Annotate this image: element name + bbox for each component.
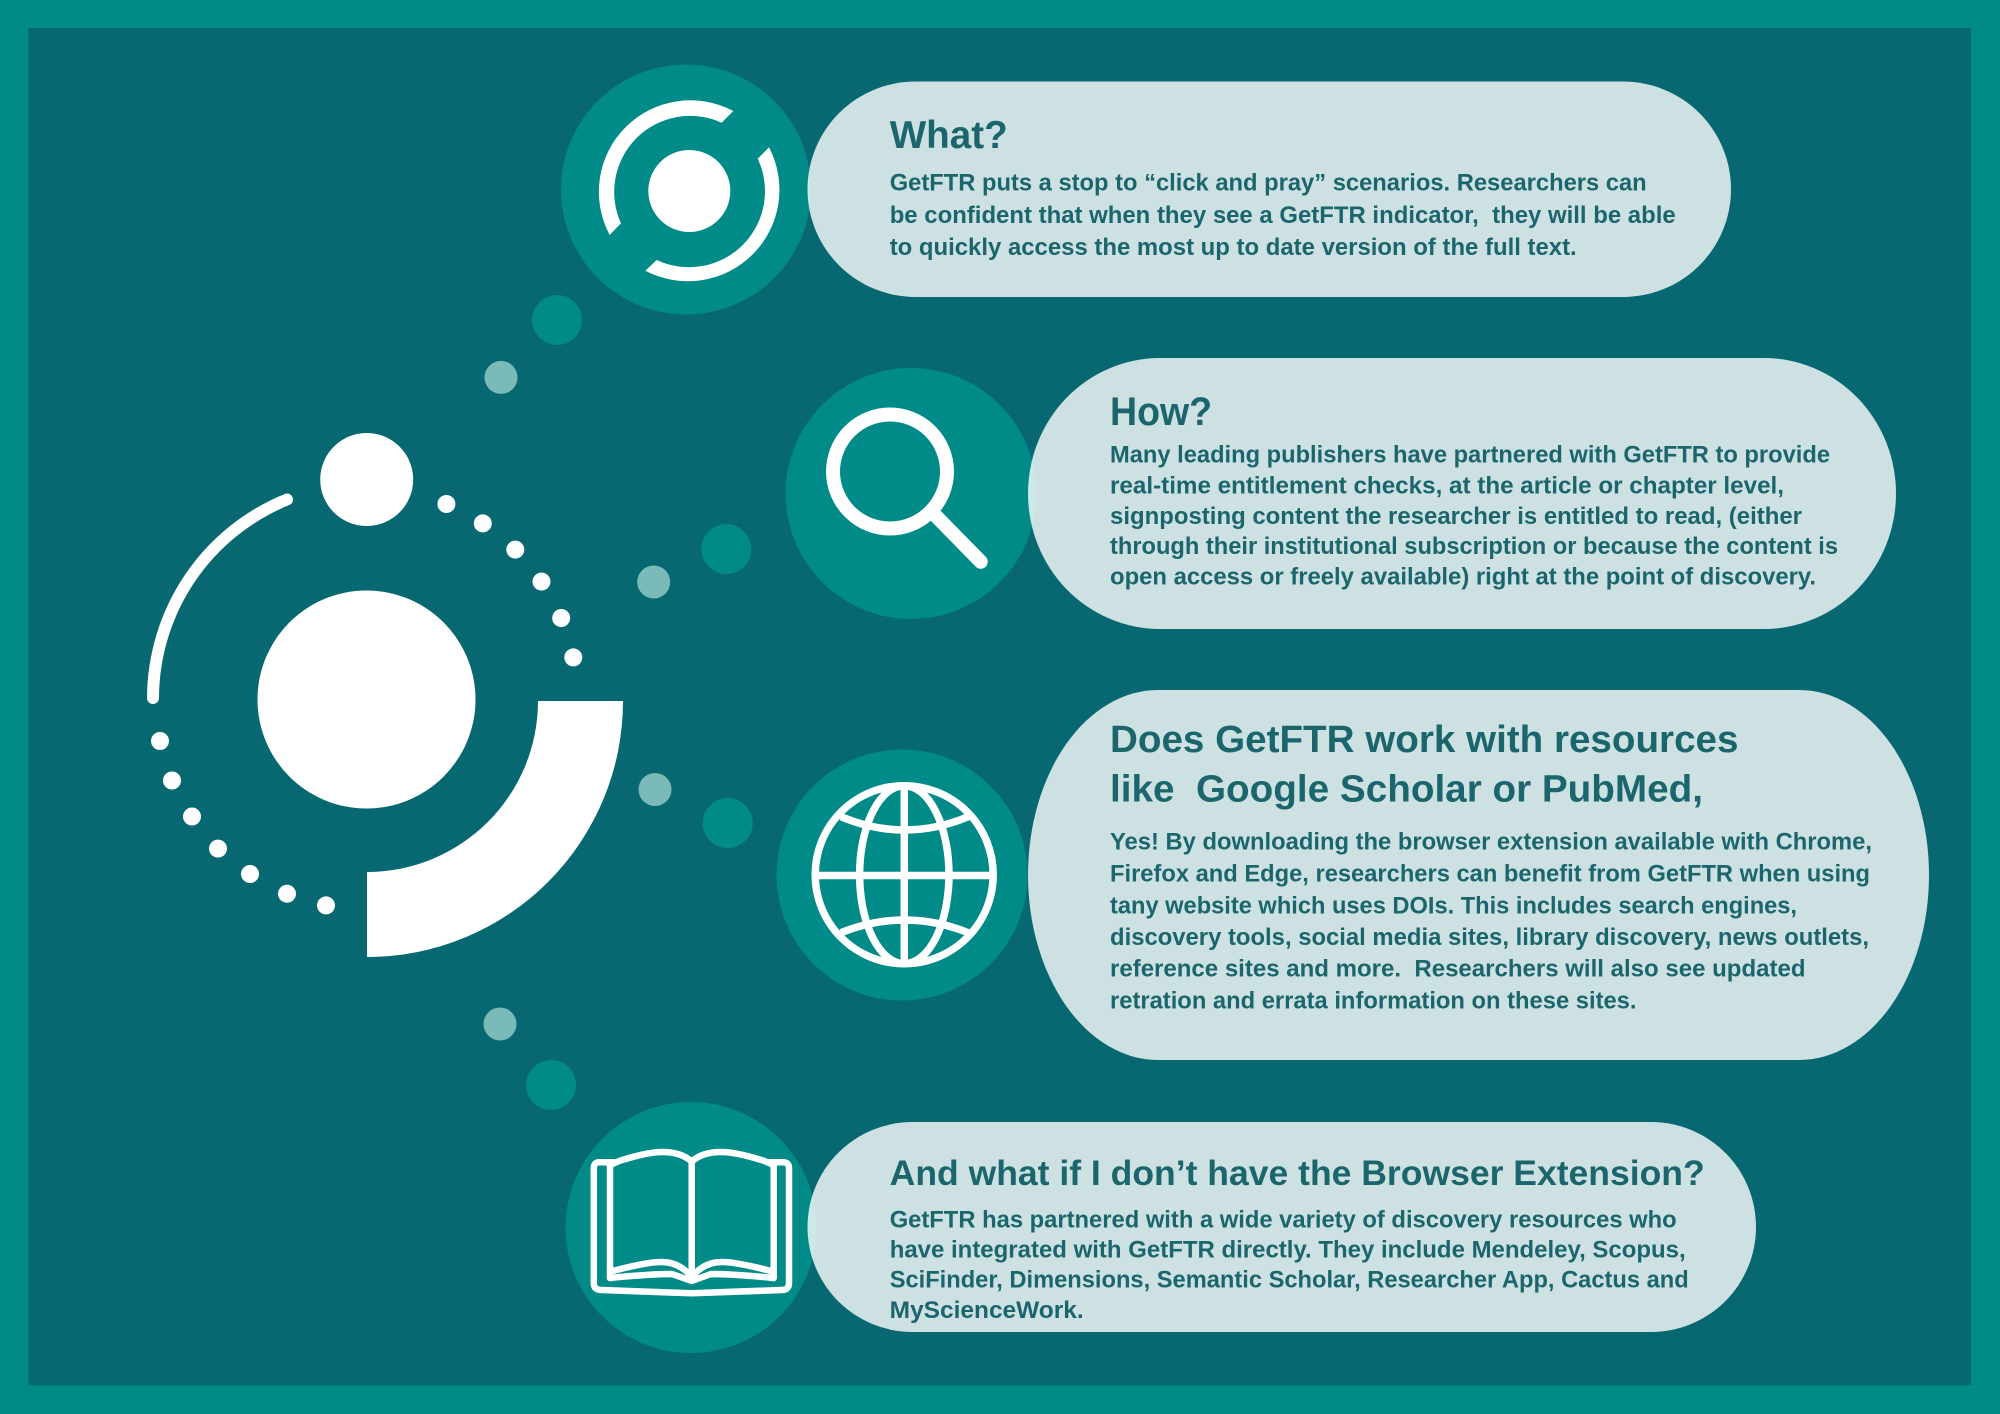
central logo — [151, 433, 623, 957]
body text: open access or freely available) right at the point of discovery. — [1110, 564, 1816, 591]
body text: tany website which uses DOIs. This includes search engines, — [1110, 892, 1797, 919]
heading: How? — [1110, 390, 1212, 434]
body text: MyScienceWork. — [890, 1297, 1084, 1324]
pill background — [808, 82, 1731, 297]
heading — [1110, 719, 1738, 811]
connector dots to How — [637, 524, 751, 598]
icon circle: target — [561, 64, 811, 314]
logo top circle — [320, 433, 413, 526]
body text: SciFinder, Dimensions, Semantic Scholar, Researcher App, Cactus and — [890, 1267, 1689, 1294]
body text: GetFTR puts a stop to “click and pray” scenarios. Researchers can — [890, 170, 1647, 197]
icon circle: magnifier — [786, 368, 1036, 619]
icon circle: globe — [776, 750, 1028, 1000]
body text: Many leading publishers have partnered with GetFTR to provide — [1110, 442, 1830, 469]
pill background — [1028, 690, 1929, 1060]
heading: What? — [890, 114, 1008, 157]
heading: Does GetFTR work with resources — [1110, 719, 1738, 761]
connector dots to What — [484, 295, 582, 394]
panel: Browser Extension — [566, 1102, 1756, 1353]
body text: through their institutional subscription or because the content is — [1110, 533, 1838, 560]
heading: And what if I don’t have the Browser Extension? — [890, 1154, 1705, 1193]
body text: GetFTR has partnered with a wide variety of discovery resources who — [890, 1207, 1677, 1234]
logo lower dotted arc — [151, 732, 335, 914]
body text: to quickly access the most up to date version of the full text. — [890, 234, 1577, 261]
body text — [1110, 828, 1872, 1014]
body text: be confident that when they see a GetFTR indicator, they will be able — [890, 202, 1676, 229]
logo thick arc — [367, 701, 623, 957]
connector dots to Does GetFTR work — [638, 773, 753, 848]
pill background — [1028, 358, 1896, 629]
body text: Yes! By downloading the browser extension available with Chrome, — [1110, 828, 1872, 855]
panel: How — [786, 358, 1896, 629]
body text — [890, 170, 1676, 261]
body text: reference sites and more. Researchers will also see updated — [1110, 956, 1806, 983]
panel: What — [561, 64, 1731, 314]
logo upper dotted arc — [437, 495, 582, 666]
body text — [1110, 442, 1838, 591]
body text: Firefox and Edge, researchers can benefit from GetFTR when using — [1110, 860, 1870, 887]
body text — [890, 1207, 1689, 1324]
body text: retration and errata information on these sites. — [1110, 987, 1636, 1014]
icon circle: open book — [566, 1102, 816, 1353]
body text: real-time entitlement checks, at the article or chapter level, — [1110, 473, 1784, 500]
logo large circle — [258, 590, 476, 808]
pill background — [808, 1122, 1756, 1332]
body text: have integrated with GetFTR directly. They include Mendeley, Scopus, — [890, 1236, 1686, 1263]
heading: like Google Scholar or PubMed, — [1110, 769, 1703, 811]
logo thin arc — [153, 500, 287, 698]
body text: signposting content the researcher is entitled to read, (either — [1110, 503, 1802, 530]
panel: Does GetFTR work — [776, 690, 1929, 1060]
connector dots to Browser Extension — [484, 1008, 576, 1110]
body text: discovery tools, social media sites, library discovery, news outlets, — [1110, 924, 1869, 951]
